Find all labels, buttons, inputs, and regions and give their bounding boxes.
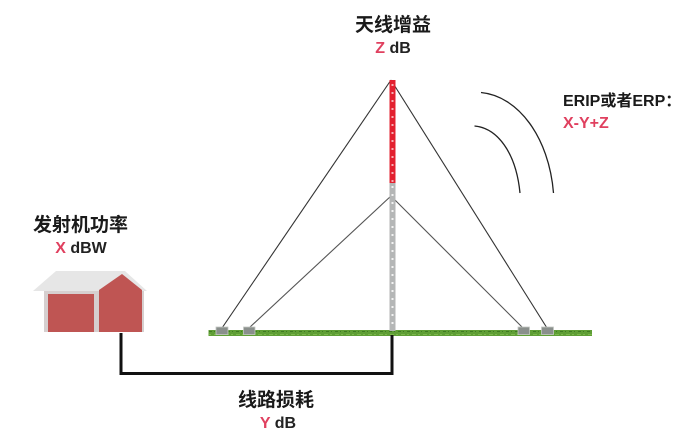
label: line loss: Y dB: [260, 415, 296, 432]
label: transmitter power: [33, 213, 128, 257]
icon: transmitter building: [33, 271, 147, 332]
building wall: [44, 291, 144, 332]
label: line loss: 线路损耗: [238, 389, 314, 411]
ground: grass strip: [208, 330, 592, 336]
label: transmitter power: 发射机功率: [33, 213, 128, 236]
antenna anchor blocks: [216, 327, 554, 334]
label: ERIP or ERP formula: X-Y+Z: [563, 115, 609, 132]
icon: radio waves: [474, 92, 554, 193]
label: ERIP or ERP formula: ERIP或者ERP：: [563, 91, 681, 110]
label: antenna gain: [355, 14, 431, 57]
antenna guy wires: [222, 80, 547, 328]
label: antenna gain: 天线增益: [355, 14, 431, 36]
left door: [48, 294, 94, 332]
roof: [33, 271, 147, 291]
label: antenna gain: Z dB: [375, 40, 411, 57]
transmission line: [121, 333, 392, 374]
right gable: [99, 274, 142, 332]
label: line loss: [238, 389, 314, 432]
label: ERIP or ERP formula: [563, 91, 681, 132]
label: transmitter power: X dBW: [55, 240, 108, 257]
antenna mast: [390, 80, 396, 331]
